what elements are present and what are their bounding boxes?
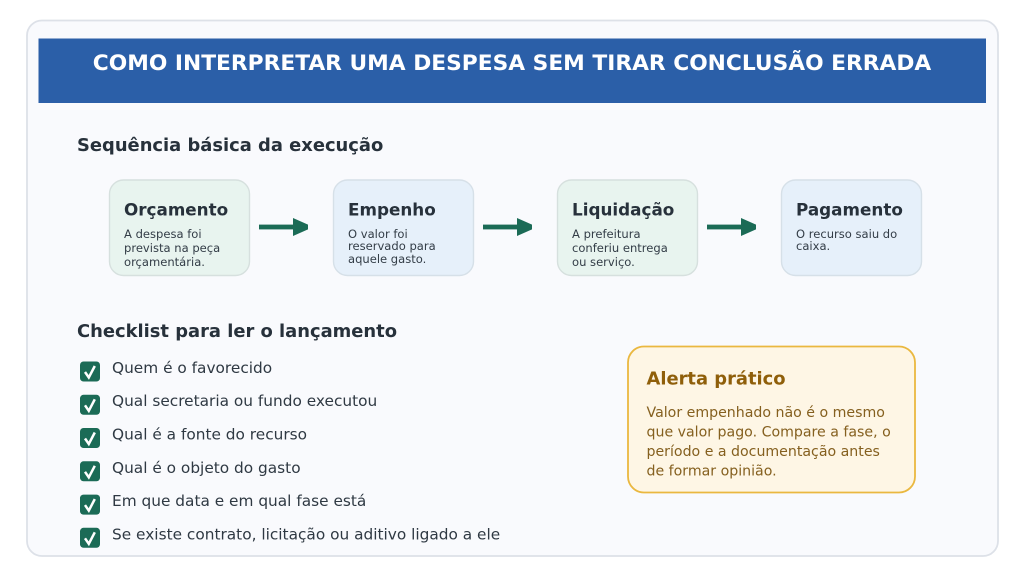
check item 3 <box>80 426 307 448</box>
check item 2: Qual secretaria ou fundo executou <box>112 392 377 410</box>
step: Orçamento: prevista na peça <box>124 241 220 255</box>
check item 6: Se existe contrato, licitação ou aditivo ligado a ele <box>112 526 500 544</box>
step: Orçamento: orçamentária. <box>124 255 205 269</box>
step: Liquidação: ou serviço. <box>572 255 635 269</box>
step: Empenho: O valor foi <box>348 227 408 241</box>
step: Empenho: reservado para <box>348 239 436 253</box>
step: Liquidação: A prefeitura <box>572 227 641 241</box>
callout text: que valor pago. Compare a fase, o <box>646 424 891 440</box>
callout: alerta prático <box>628 346 915 492</box>
step: Orçamento <box>110 180 250 276</box>
check item 5: Em que data e em qual fase está <box>112 492 366 510</box>
callout text: período e a documentação antes <box>646 444 880 460</box>
check item 3: Qual é a fonte do recurso <box>112 426 307 444</box>
callout text <box>646 405 891 480</box>
step: Liquidação <box>558 180 698 276</box>
callout heading: Alerta prático <box>646 368 786 390</box>
step: Pagamento: O recurso saiu do <box>796 227 897 241</box>
panel: checklist <box>80 359 500 548</box>
step: Pagamento <box>782 180 922 276</box>
arrow 3 <box>707 218 756 236</box>
arrow 2 <box>483 218 532 236</box>
arrow 1 <box>259 218 308 236</box>
step: Orçamento: A despesa foi <box>124 227 202 241</box>
step: Empenho: aquele gasto. <box>348 252 426 266</box>
step: Liquidação: Liquidação <box>572 200 674 220</box>
check item 1: Quem é o favorecido <box>112 359 272 377</box>
title banner <box>38 38 986 103</box>
step: Pagamento: Pagamento <box>796 200 903 220</box>
step: Liquidação: conferiu entrega <box>572 241 668 255</box>
step: Empenho: Empenho <box>348 200 436 220</box>
title: COMO INTERPRETAR UMA DESPESA SEM TIRAR CONCLUSÃO ERRADA <box>93 50 931 76</box>
panel: flow sequence <box>110 180 922 276</box>
callout text: Valor empenhado não é o mesmo <box>646 405 885 421</box>
callout text: de formar opinião. <box>646 464 777 480</box>
check item 1 <box>80 359 272 382</box>
heading: checklist: Checklist para ler o lançamento <box>77 321 397 342</box>
check item 4: Qual é o objeto do gasto <box>112 459 301 477</box>
check item 4 <box>80 459 301 481</box>
step: Empenho <box>334 180 474 276</box>
step: Orçamento: Orçamento <box>124 200 228 220</box>
step: Pagamento: caixa. <box>796 239 830 253</box>
heading: sequência: Sequência básica da execução <box>77 135 383 156</box>
